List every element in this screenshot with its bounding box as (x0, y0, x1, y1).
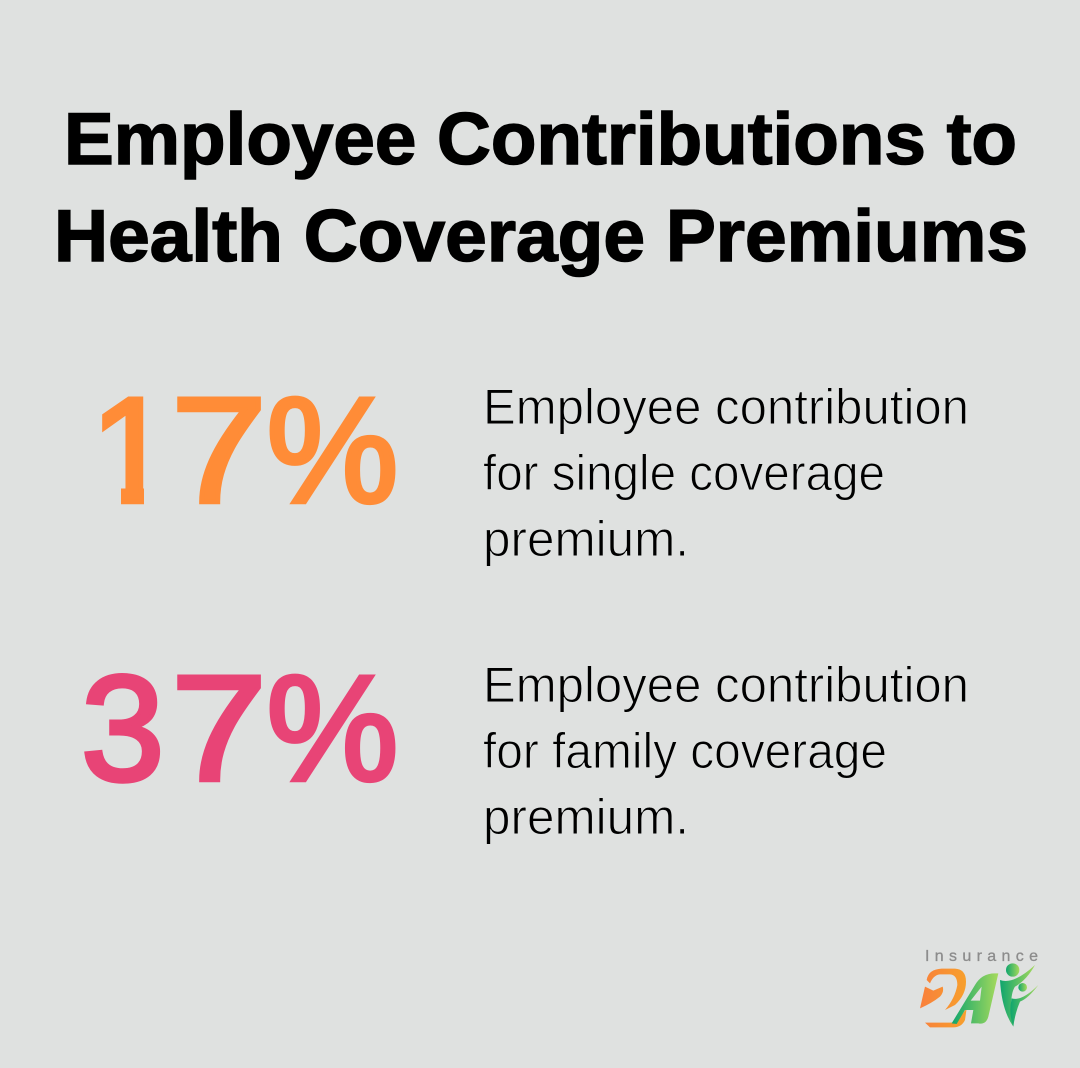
logo wordmark: Insurance (925, 948, 1038, 965)
title: Health Coverage Premiums (54, 196, 1028, 277)
logo letter A (952, 973, 998, 1024)
description: single coverage: Employee contribution (483, 379, 969, 435)
logo graphic (920, 963, 1038, 1027)
description: single coverage: premium. (483, 511, 689, 567)
statistic: 17%: 1 (90, 366, 173, 534)
description: single coverage: for single coverage (483, 445, 885, 501)
logo: Insurance2Ai (920, 948, 1038, 1027)
logo figures (1006, 963, 1019, 977)
statistic: 37%: % (266, 644, 398, 812)
statistic: 37%: 3 (81, 644, 164, 812)
description: single coverage (483, 379, 969, 567)
statistic: 37%: 7 (171, 644, 267, 812)
description: family coverage (483, 657, 969, 845)
title: Employee Contributions to (64, 99, 1017, 180)
description: family coverage: premium. (483, 789, 689, 845)
statistic: 17%: 7 (171, 366, 267, 534)
description: family coverage: for family coverage (483, 723, 887, 779)
statistic: 17% (102, 396, 396, 506)
description: family coverage: Employee contribution (483, 657, 969, 713)
logo numeral 2 (920, 969, 967, 1027)
statistic: 37% (81, 644, 398, 812)
statistic: 17%: % (266, 366, 398, 534)
title (54, 99, 1028, 277)
